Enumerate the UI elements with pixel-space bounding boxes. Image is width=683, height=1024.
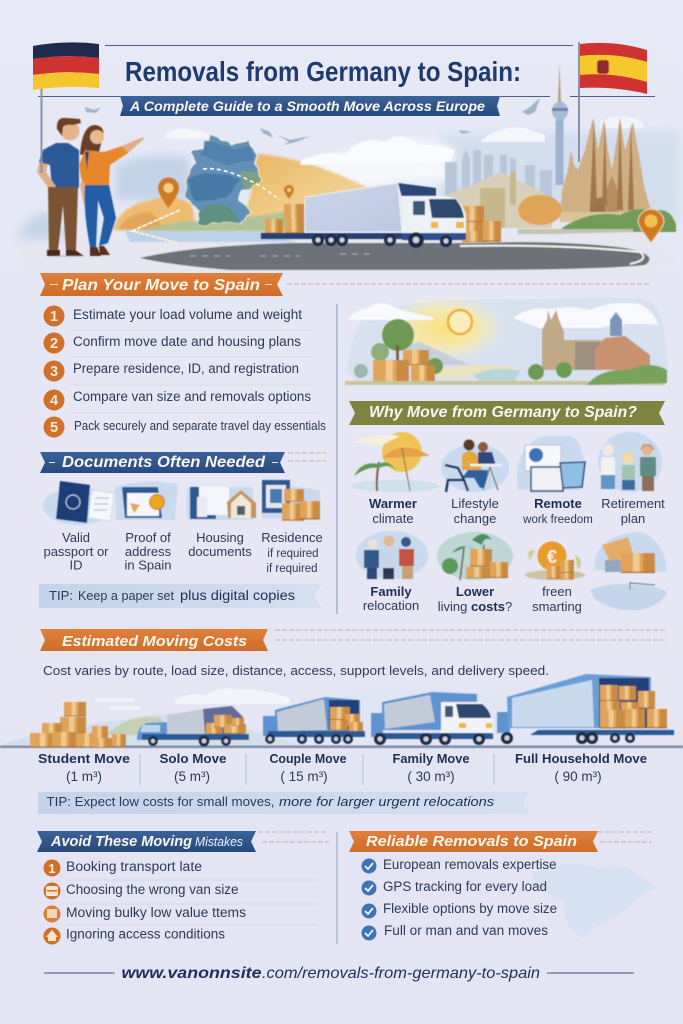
step 1: 1 <box>50 309 58 325</box>
label: lower living costs: living costs? <box>438 599 512 614</box>
mistake 3: Moving bulky low value ttems <box>66 905 246 920</box>
TV tower <box>552 63 568 185</box>
route dashes <box>132 210 180 243</box>
step 5 <box>44 416 326 438</box>
step 4 <box>44 389 311 410</box>
icon: proof of address <box>115 482 178 520</box>
icon: lifestyle <box>441 440 509 492</box>
step 2: Confirm move date and housing plans <box>73 334 301 349</box>
checklist: plan steps <box>44 306 326 438</box>
divider: lower columns <box>336 832 338 944</box>
icon: euro coin and boxes: € <box>547 547 557 567</box>
icon: map pin right <box>638 209 664 243</box>
flag: Spain <box>578 42 647 162</box>
title: Removals from Germany to Spain: <box>125 56 521 87</box>
step 5: 5 <box>50 420 58 436</box>
label: passport: passport or <box>43 544 109 559</box>
step 4: 4 <box>50 393 58 409</box>
truck: couple move <box>263 697 365 744</box>
label: couple move: Couple Move <box>270 751 346 766</box>
reasons grid <box>351 432 667 614</box>
mistake 1: Booking transport late <box>66 859 202 874</box>
label: remote work freedom: work freedom <box>522 514 593 526</box>
icon: Germany map <box>185 133 280 225</box>
documents icons <box>43 480 320 525</box>
subtitle ribbon: A Complete Guide to a Smooth Move Across Europe <box>129 99 486 114</box>
footer URL: www.vanonnsite <box>122 965 262 982</box>
step 3: Prepare residence, ID, and registration <box>73 361 299 376</box>
label: retirement plan: plan <box>621 511 645 526</box>
label: warmer climate: climate <box>372 511 414 526</box>
benefit 3: Flexible options by move size <box>383 901 557 916</box>
label: freen smarting: freen <box>542 584 572 599</box>
label: solo move: Solo Move <box>160 751 226 766</box>
mistake 1: 1 <box>48 861 56 876</box>
benefit 4: Full or man and van moves <box>384 923 548 938</box>
tip: costs: TIP: Expect low costs for small moves, <box>46 794 274 809</box>
step 4: Compare van size and removals options <box>73 389 311 404</box>
label: freen smarting: smarting <box>532 599 582 614</box>
icon: euro coin and boxes <box>525 542 585 580</box>
mistake 4: Ignoring access conditions <box>66 926 225 942</box>
icon: map pin left <box>158 178 179 208</box>
van: solo move <box>137 706 249 746</box>
label: family relocation: relocation <box>363 598 419 613</box>
label: family relocation: Family <box>370 584 412 599</box>
benefit 1: European removals expertise <box>383 857 556 872</box>
benefit 2: GPS tracking for every load <box>383 879 547 894</box>
water <box>125 231 300 243</box>
subtitle ribbon <box>120 96 500 116</box>
icon: map pin small <box>284 185 294 199</box>
label: lifestyle change: Lifestyle <box>451 496 499 511</box>
hills <box>113 154 372 232</box>
city skyline <box>440 148 552 228</box>
icon: housing documents <box>187 487 256 520</box>
ground and road <box>18 232 676 274</box>
tip: costs: more for larger urgent relocations <box>279 794 495 809</box>
icon: retirement <box>598 432 662 492</box>
label: housing: Housing <box>196 530 244 545</box>
heading: Why Move from Germany to Spain <box>349 401 665 425</box>
heading: Avoid These Moving Mistakes: Mistakes <box>195 835 243 849</box>
icon: lower living costs <box>437 532 513 580</box>
label: student move: Student Move <box>38 751 130 766</box>
ground line <box>0 746 683 748</box>
step 1 <box>44 306 302 326</box>
title rules <box>38 46 655 96</box>
icon: boxes and map <box>590 532 667 610</box>
label: warmer climate: Warmer <box>369 496 417 511</box>
tip: documents <box>39 584 322 608</box>
heading: Why Move from Germany to Spain: Why Move from Germany to Spain? <box>369 404 638 421</box>
value: family move: ( 30 m³) <box>407 769 455 784</box>
tip: documents: plus digital copies <box>180 588 295 603</box>
icons: reasons row 2 <box>356 531 667 610</box>
step 5: Pack securely and separate travel day essentials <box>74 418 326 433</box>
list: mistakes <box>44 859 318 944</box>
moving sizes illustration <box>0 674 683 748</box>
step 2: 2 <box>50 336 58 352</box>
label: remote work freedom: Remote <box>534 496 582 511</box>
intro text: costs: Cost varies by route, load size, distance, access, support levels, and delivery speed. <box>43 663 549 678</box>
label: residence: if required <box>267 548 319 560</box>
value: couple move: ( 15 m³) <box>280 769 328 784</box>
icon: residence boxes <box>262 480 320 521</box>
label: residence: if required <box>266 563 318 575</box>
step 3: 3 <box>50 364 58 380</box>
icons: reasons row 1 <box>351 432 662 492</box>
autumn tree and bushes <box>518 195 676 234</box>
icon: family <box>356 531 428 579</box>
icon: remote work <box>517 436 585 491</box>
sky washes <box>18 130 680 240</box>
label: lower living costs: Lower <box>456 584 494 599</box>
label: passport: Valid <box>62 530 90 545</box>
icon: passport <box>43 481 114 525</box>
hero illustration <box>18 63 680 274</box>
step 2 <box>44 332 301 354</box>
tip: documents: TIP: <box>49 588 73 603</box>
step 3 <box>44 360 299 382</box>
list: reliable removals <box>362 857 557 940</box>
box pile: student move <box>30 702 126 748</box>
tip: costs <box>38 792 530 814</box>
step 1: Estimate your load volume and weight <box>73 307 302 322</box>
heading: Estimated Moving Costs <box>40 629 665 651</box>
cathedral <box>560 118 654 222</box>
label: passport: ID <box>70 558 82 572</box>
truck and boxes <box>261 183 501 248</box>
tip: documents: Keep a paper set <box>78 589 175 603</box>
divider: upper columns <box>336 304 338 614</box>
label: proof of address: in Spain <box>125 558 171 572</box>
label: proof of address: address <box>125 544 172 559</box>
label: lifestyle change: change <box>454 511 496 526</box>
flag: Germany <box>33 42 99 173</box>
heading: Reliable Removals to Spain: Reliable Removals to Spain <box>366 833 577 850</box>
value: full household move: ( 90 m³) <box>554 769 602 784</box>
heading: Reliable Removals to Spain <box>349 831 652 852</box>
footer URL <box>44 965 634 982</box>
heading: Documents Often Needed: Documents Often Needed <box>62 454 266 471</box>
heading: Estimated Moving Costs: Estimated Moving Costs <box>62 633 247 650</box>
man figure <box>37 118 84 257</box>
label: retirement plan: Retirement <box>601 496 665 511</box>
labels: reasons row 1 <box>369 496 665 526</box>
move size labels <box>38 751 647 785</box>
label: proof of address: Proof of <box>125 530 171 545</box>
documents labels <box>43 530 323 575</box>
woman figure <box>79 125 144 256</box>
icon: warm climate <box>351 432 439 492</box>
map watermark: Spain <box>530 864 654 938</box>
label: residence: Residence <box>261 530 323 545</box>
label: housing: documents <box>188 544 252 559</box>
label: family move: Family Move <box>392 751 470 766</box>
truck: full household move <box>497 674 674 744</box>
heading: Plan Your Move to Spain <box>40 273 650 296</box>
truck: family move <box>371 692 493 745</box>
heading: Documents Often Needed <box>40 452 326 473</box>
sun scene panel <box>345 294 668 385</box>
clouds and hills <box>0 688 500 745</box>
value: solo move: (5 m³) <box>174 769 210 784</box>
heading: Avoid These Moving Mistakes <box>37 831 329 852</box>
footer URL: .com/removals-from-germany-to-spain <box>262 965 540 982</box>
mistake 2: Choosing the wrong van size <box>66 882 238 897</box>
labels: reasons row 2 <box>363 584 582 614</box>
clouds <box>165 116 645 165</box>
birds <box>85 98 540 145</box>
value: student move: (1 m³) <box>66 769 102 784</box>
label: full household move: Full Household Move <box>515 751 647 766</box>
heading: Plan Your Move to Spain: Plan Your Move to Spain <box>62 277 260 294</box>
heading: Avoid These Moving Mistakes: Avoid These Moving <box>50 834 192 850</box>
